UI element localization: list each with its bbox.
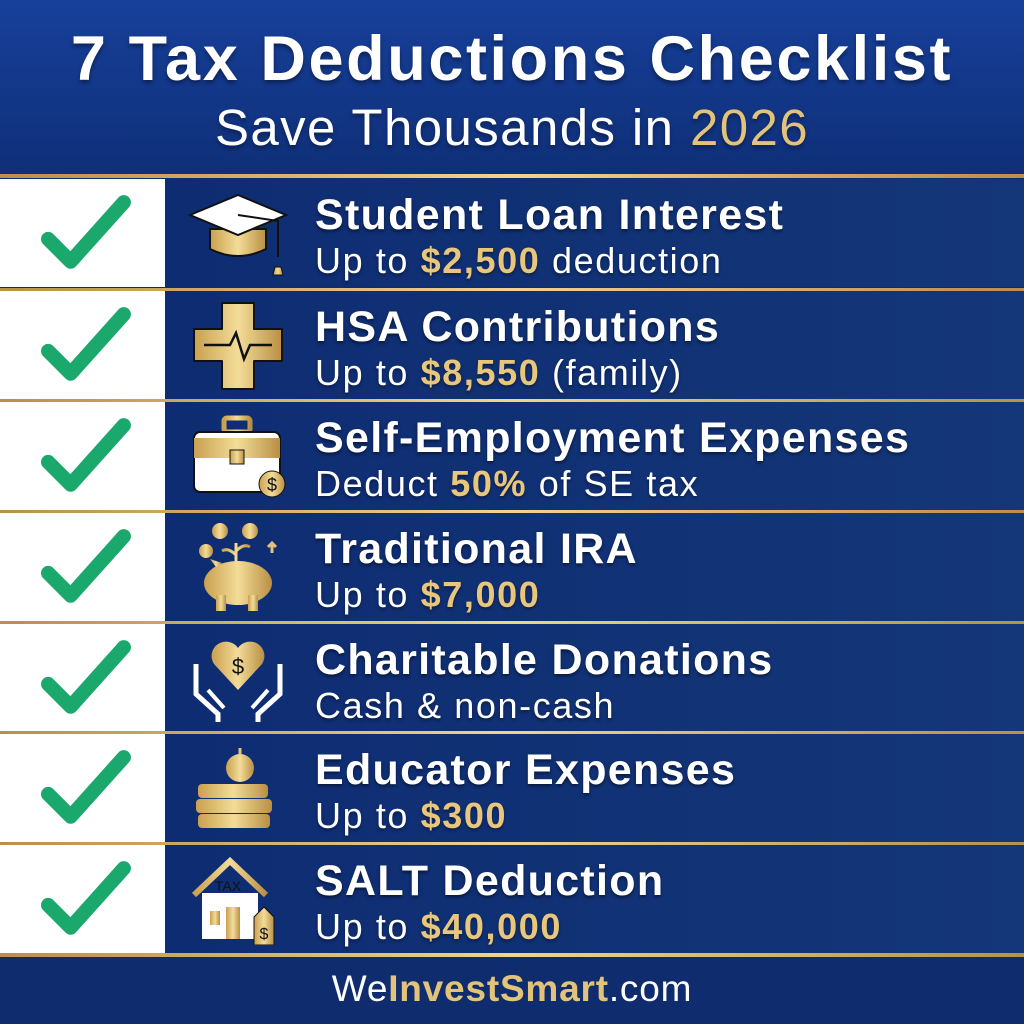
- icon: check: [41, 640, 131, 714]
- row 2: HSA: Up to $8,550 (family): [315, 352, 683, 393]
- icon: check: [41, 529, 131, 603]
- icon: house tax: TAX: [215, 878, 242, 894]
- icon: medical cross: [193, 302, 283, 390]
- text: Student Loan Interest: [315, 191, 784, 239]
- header: [0, 0, 1024, 175]
- row 3: self-employment: Self-Employment Expenses: [315, 414, 910, 462]
- row 7: SALT: Up to $40,000: [315, 906, 562, 947]
- row 2: HSA: HSA Contributions: [315, 303, 720, 351]
- title: 7 Tax Deductions Checklist: [71, 24, 953, 94]
- row 4: IRA: Up to $7,000: [315, 574, 540, 615]
- row 3: self-employment: Deduct 50% of SE tax: [315, 463, 699, 504]
- icon: house tax: [192, 857, 274, 945]
- row 6: educator: [0, 734, 1024, 842]
- row 4: IRA: [0, 513, 1024, 621]
- icon: briefcase: $: [267, 475, 277, 495]
- row 7: SALT: SALT Deduction: [315, 857, 664, 905]
- icon: check: [41, 307, 131, 381]
- icon: check: [41, 750, 131, 824]
- footer: WeInvestSmart.com: [332, 968, 692, 1009]
- icon: books and apple: [196, 748, 272, 828]
- row 1: student loan: [0, 179, 1024, 287]
- icon: graduation cap: [188, 194, 288, 276]
- row 6: educator: Educator Expenses: [315, 746, 736, 794]
- icon: check: [41, 418, 131, 492]
- row 7: SALT: [0, 845, 1024, 953]
- row 4: IRA: Traditional IRA: [315, 525, 638, 573]
- row 5: charitable: Cash & non-cash: [315, 685, 615, 726]
- row 5: charitable: Charitable Donations: [315, 636, 773, 684]
- icon: briefcase: [193, 416, 286, 498]
- icon: piggy bank: [199, 523, 277, 611]
- icon: check: [41, 861, 131, 935]
- row 2: HSA: [0, 291, 1024, 399]
- icon: house tax: $: [260, 926, 269, 943]
- row 6: educator: Up to $300: [315, 795, 507, 836]
- row 3: self-employment: [0, 402, 1024, 510]
- icon: check: [41, 195, 131, 269]
- row 1: student loan: Up to $2,500 deduction: [315, 240, 723, 281]
- icon: heart hands: [194, 642, 282, 722]
- row 5: charitable: [0, 624, 1024, 731]
- subtitle: Save Thousands in 2026: [215, 99, 809, 156]
- icon: heart hands: $: [232, 654, 244, 679]
